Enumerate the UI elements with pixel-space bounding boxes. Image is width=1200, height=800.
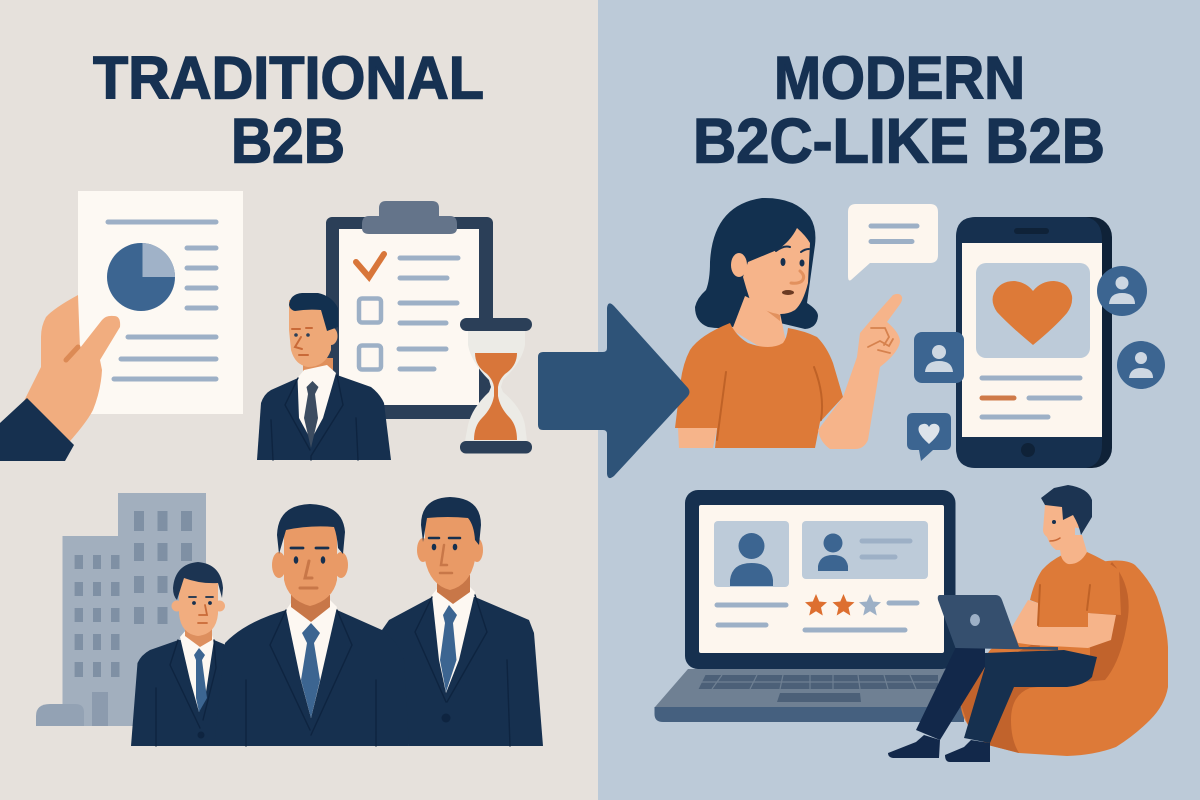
arrow — [538, 303, 690, 478]
businessman: small left — [131, 562, 230, 746]
star rating — [805, 594, 881, 616]
face — [289, 300, 331, 367]
thumb crease — [66, 347, 78, 360]
smile — [1050, 538, 1060, 541]
finger lines — [868, 328, 893, 353]
sand — [474, 353, 517, 440]
front leg — [964, 650, 1097, 743]
screen text lines — [717, 603, 917, 630]
clipboard board — [326, 217, 493, 419]
checklist lines — [399, 258, 458, 369]
shirt crease — [717, 367, 822, 440]
hourglass — [460, 318, 532, 454]
sleeve — [0, 398, 74, 461]
clipboard paper — [339, 229, 479, 405]
eye — [1052, 520, 1056, 524]
suit lines — [271, 375, 358, 460]
screen — [962, 243, 1102, 437]
businessman at clipboard — [257, 293, 391, 460]
shirt — [298, 365, 336, 440]
profile icon: square — [914, 332, 964, 383]
heart — [993, 281, 1072, 345]
like bubble icon — [907, 413, 951, 461]
laptop lid — [685, 490, 956, 669]
group of three businessmen — [131, 497, 543, 746]
bottom cap — [460, 441, 532, 454]
phone text lines — [982, 378, 1080, 417]
facial features — [776, 246, 809, 295]
profile icon: lower circle — [1117, 341, 1165, 389]
small profile card — [802, 521, 928, 579]
man on beanbag with laptop — [888, 485, 1168, 762]
door — [92, 692, 108, 726]
building towers — [62, 493, 206, 726]
neck — [303, 358, 333, 378]
hair — [1041, 485, 1092, 535]
pointing arm and hand — [818, 294, 902, 449]
speaker — [1014, 228, 1049, 234]
bare left arm — [678, 428, 717, 448]
businessman: middle — [214, 504, 409, 746]
speech bubble — [848, 204, 938, 280]
glass — [465, 331, 527, 441]
large profile card — [714, 521, 789, 587]
torso shirt — [1030, 552, 1121, 657]
phone body — [956, 217, 1112, 468]
beanbag shadow — [961, 562, 1129, 753]
shirt sleeve crease — [1038, 585, 1090, 625]
laptop screen — [699, 505, 944, 653]
document held in hand — [0, 191, 243, 461]
report text lines — [108, 222, 216, 379]
profile icon: top circle — [1097, 266, 1147, 316]
heading: Traditional B2B — [93, 44, 484, 176]
check mark — [356, 254, 384, 277]
keyboard base — [655, 669, 964, 707]
hair — [289, 293, 338, 331]
arm — [1012, 600, 1116, 648]
face — [1043, 505, 1075, 550]
home button — [1021, 443, 1035, 457]
pie chart — [107, 243, 175, 311]
top cap — [460, 318, 532, 331]
neck — [1058, 535, 1087, 564]
neck — [732, 296, 787, 347]
keyboard keys — [699, 675, 938, 689]
businessman: right — [382, 497, 543, 746]
laptop with profile page — [654, 490, 964, 722]
face — [743, 228, 810, 314]
beanbag — [961, 561, 1168, 756]
rear shoe — [888, 735, 940, 758]
hair — [695, 198, 818, 329]
image panel — [976, 263, 1090, 358]
paper report — [78, 191, 243, 414]
small laptop — [938, 595, 1058, 650]
windows — [75, 511, 192, 677]
hand — [22, 295, 120, 450]
orange shirt — [675, 323, 843, 448]
heading: Traditional B2B: B2B — [231, 106, 345, 176]
front shoe — [945, 740, 990, 762]
heading: Modern B2C-like B2B: B2C-LIKE B2B — [693, 106, 1105, 176]
office building — [36, 493, 206, 726]
ear — [1072, 516, 1084, 528]
empty check boxes — [359, 298, 381, 370]
tie — [304, 381, 318, 448]
ear — [731, 253, 747, 277]
heading: Modern B2C-like B2B: MODERN — [774, 44, 1025, 112]
heading: Traditional B2B: TRADITIONAL — [93, 44, 484, 112]
ear — [324, 327, 338, 345]
facial features — [292, 328, 312, 355]
panel: traditional B2B background — [0, 0, 598, 800]
spacebar — [777, 693, 861, 702]
heading: Modern B2C-like B2B — [693, 44, 1105, 176]
base front edge — [654, 707, 964, 722]
smartphone — [956, 217, 1112, 468]
panel: modern B2C-like B2B background — [598, 0, 1200, 800]
clipboard checklist — [326, 201, 493, 419]
rear leg — [916, 648, 985, 740]
suit — [257, 375, 391, 460]
clipboard clip — [362, 201, 457, 234]
annex — [36, 704, 84, 726]
woman pointing — [675, 198, 902, 449]
